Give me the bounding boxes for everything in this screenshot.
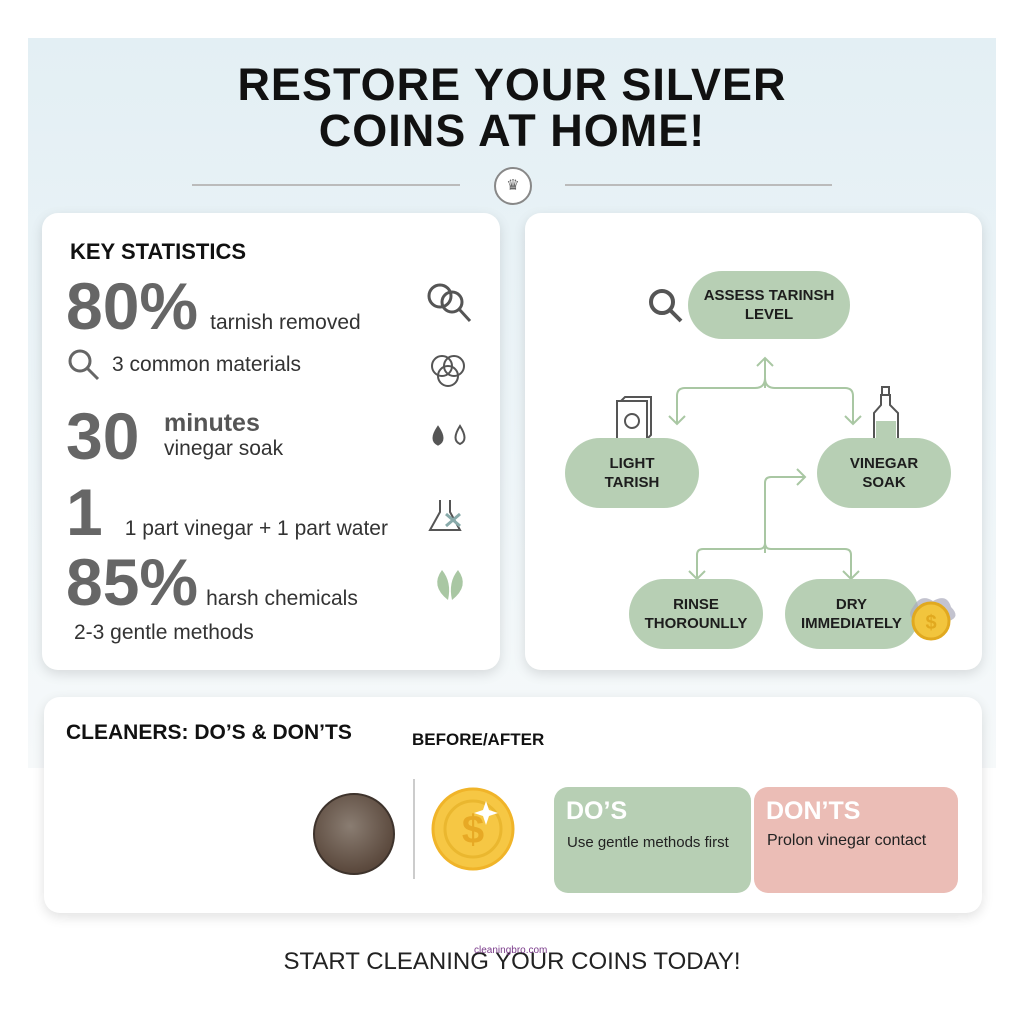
title: RESTORE YOUR SILVER: [237, 59, 787, 110]
step: rinse: RINSE: [673, 596, 719, 613]
icon: shiny coin: [432, 788, 514, 870]
title: [237, 59, 787, 156]
step: rinse: [629, 579, 763, 649]
do's box: DO’S: [566, 797, 627, 825]
stat 30 minutes: [66, 399, 284, 473]
icons column: [428, 284, 471, 600]
stat 2-3 methods: 2-3 gentle methods: [74, 621, 254, 644]
icon: box: [616, 396, 652, 438]
step: dry: DRY: [836, 596, 867, 613]
icon: gold coin cloth: [910, 598, 956, 640]
icon: gold coin cloth: $: [925, 612, 937, 634]
stat 1 part: 1 1 part vinegar + 1 part water: [66, 475, 388, 549]
stat 3 materials: 3 common materials: [112, 353, 301, 376]
watermark: cleaningbro.com: [474, 945, 547, 956]
connector arrows: [668, 356, 862, 579]
step: light tarnish: [565, 438, 699, 508]
background: [28, 38, 996, 768]
heading: KEY STATISTICS: [70, 239, 246, 264]
stat 30 minutes: vinegar soak: [164, 437, 283, 460]
icon: magnifier: [649, 289, 682, 322]
panel: key statistics: [42, 213, 500, 670]
step: assess: LEVEL: [745, 306, 793, 323]
don'ts box: DON’TS: [766, 797, 860, 825]
stat 30 minutes: 30: [66, 399, 139, 473]
stat 3 materials: [68, 350, 301, 380]
stat 80%: 80% tarnish removed: [66, 269, 361, 343]
stat 85%: 85% harsh chemicals: [66, 545, 358, 619]
step: light tarnish: TARISH: [605, 474, 659, 491]
step: assess: ASSESS TARINSH: [704, 287, 834, 304]
title divider with crown icon: ♛: [506, 177, 520, 194]
stat 30 minutes: minutes: [164, 409, 260, 437]
icon: bottle: [873, 386, 899, 438]
footer call to action: START CLEANING YOUR COINS TODAY!: [284, 948, 740, 975]
step: vinegar soak: SOAK: [862, 474, 906, 491]
step: dry: IMMEDIATELY: [801, 615, 902, 632]
do's box: Use gentle methods first: [567, 834, 729, 851]
icon: shiny coin: $: [462, 808, 484, 852]
heading: CLEANERS: DO’S & DON’TS: [66, 721, 352, 744]
panel: cleaners do's and don'ts: [44, 697, 982, 913]
step: vinegar soak: VINEGAR: [850, 455, 918, 472]
panel: process flowchart: [525, 213, 982, 670]
don'ts box: Prolon vinegar contact: [767, 832, 926, 849]
step: vinegar soak: [817, 438, 951, 508]
do's box: [554, 787, 751, 893]
step: light tarnish: LIGHT: [609, 455, 654, 472]
icon: tarnished coin: [313, 793, 395, 875]
step: rinse: THOROUNLLY: [645, 615, 747, 632]
step: assess: [688, 271, 850, 339]
title: COINS AT HOME!: [319, 105, 705, 156]
subheading: BEFORE/AFTER: [412, 730, 544, 749]
step: dry: [785, 579, 919, 649]
don'ts box: [754, 787, 958, 893]
